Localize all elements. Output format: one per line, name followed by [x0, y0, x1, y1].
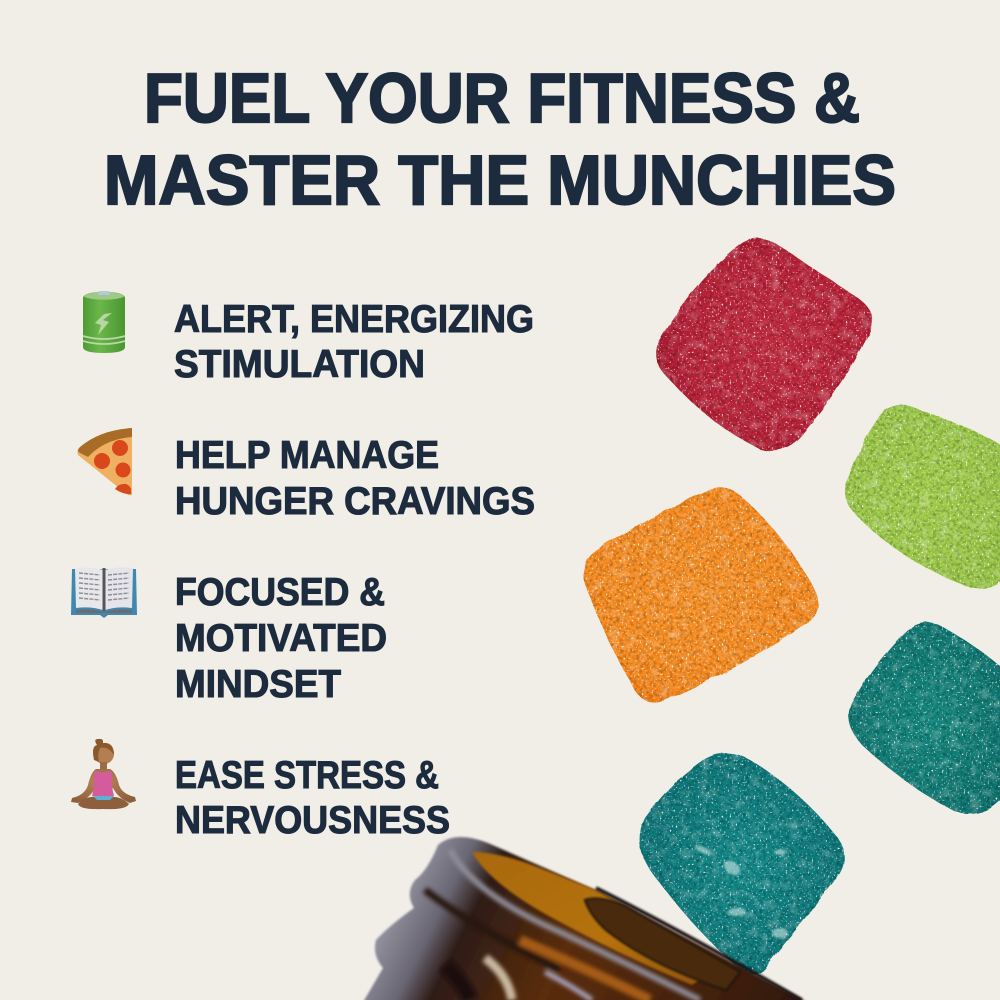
text: focused and motivated mindset: MOTIVATED	[175, 617, 387, 660]
benefit: help manage hunger cravings	[77, 428, 535, 523]
text: help manage hunger cravings: HELP MANAGE	[175, 434, 439, 477]
text: help manage hunger cravings: HUNGER CRAVINGS	[175, 480, 535, 523]
text: alert, energizing stimulation: ALERT, ENERGIZING	[174, 298, 534, 341]
jar body	[362, 837, 810, 1000]
title: MASTER THE MUNCHIES	[104, 141, 896, 219]
jar opening	[472, 852, 720, 985]
text: ease stress and nervousness	[175, 754, 450, 842]
benefit: ease stress and nervousness	[71, 739, 450, 842]
title	[104, 59, 896, 219]
jar highlights	[425, 850, 700, 1000]
text: focused and motivated mindset: FOCUSED &	[175, 571, 385, 614]
text: ease stress and nervousness: EASE STRESS &	[175, 754, 439, 797]
gummy: teal bottom	[640, 753, 844, 974]
text: focused and motivated mindset: MINDSET	[175, 663, 341, 706]
jar inner lip	[585, 898, 740, 990]
amber jar	[362, 837, 810, 1000]
benefit: alert, energizing stimulation	[83, 291, 534, 386]
icon: battery	[83, 291, 125, 353]
sugar crystals on bottom gummy	[694, 843, 788, 938]
text: focused and motivated mindset	[175, 571, 387, 706]
title: FUEL YOUR FITNESS &	[144, 59, 860, 137]
text: ease stress and nervousness: NERVOUSNESS	[175, 799, 450, 842]
benefit: focused and motivated mindset	[71, 567, 387, 706]
icon: open book	[71, 567, 137, 618]
gummy: teal right	[849, 622, 1000, 814]
text: alert, energizing stimulation: STIMULATION	[174, 343, 425, 386]
jar rim edge	[596, 888, 802, 1000]
icon: meditating woman	[71, 739, 136, 809]
text: help manage hunger cravings	[175, 434, 535, 523]
gummy: red	[656, 238, 872, 451]
icon: pizza slice	[77, 428, 132, 495]
gummy: orange	[584, 488, 818, 703]
gummy: green	[844, 405, 1000, 589]
text: alert, energizing stimulation	[174, 298, 534, 386]
